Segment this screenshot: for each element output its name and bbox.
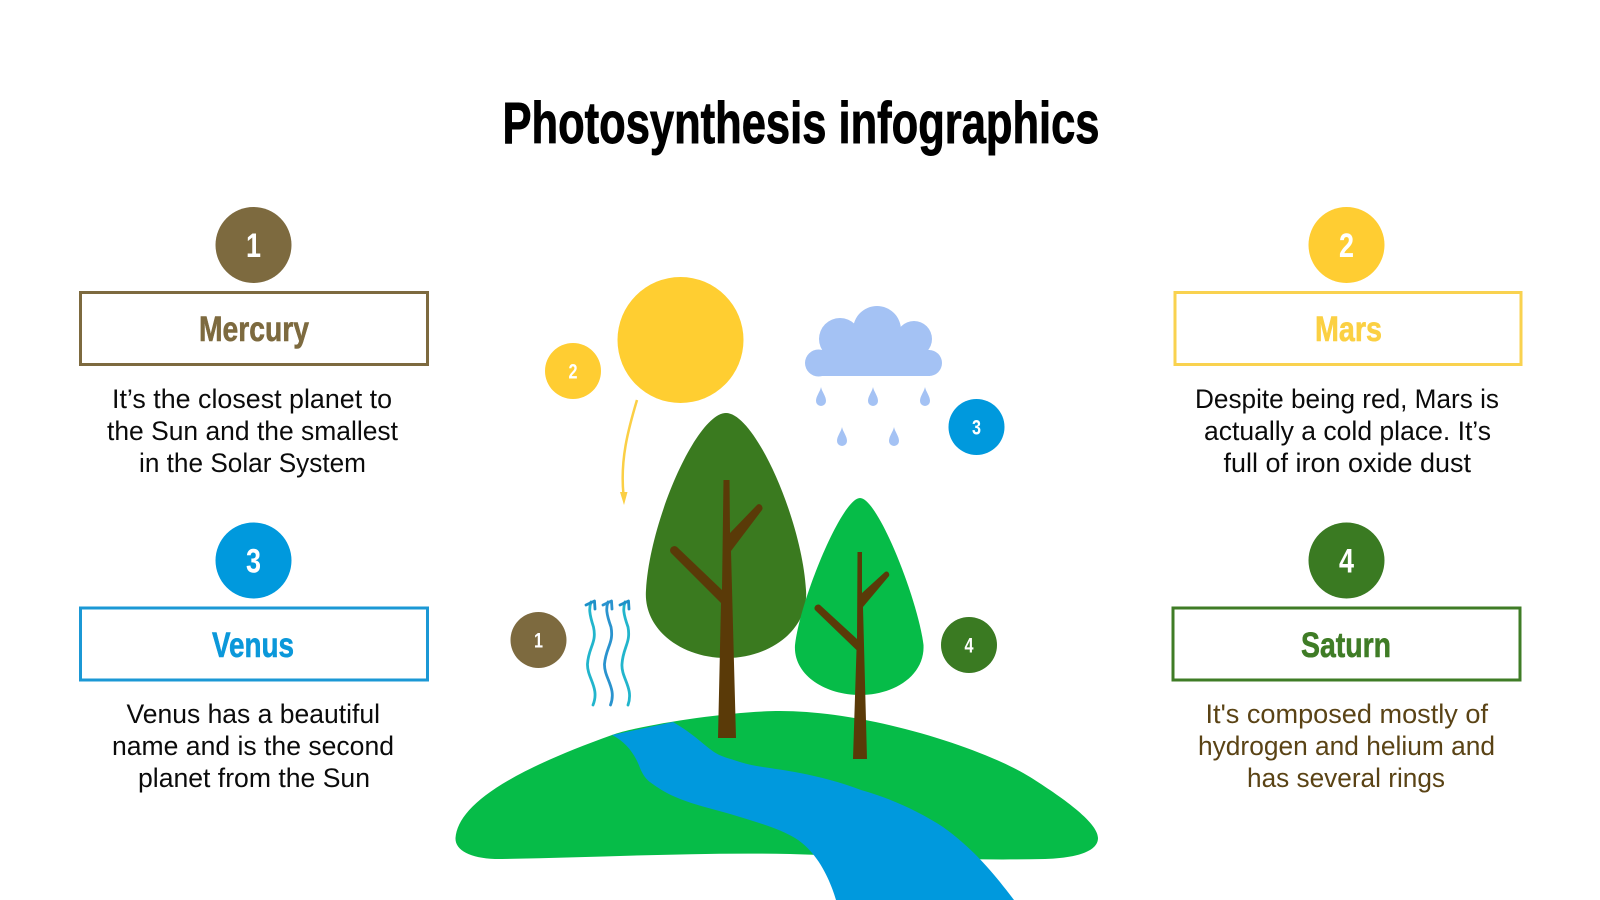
text: Saturn description: hydrogen and helium and (1198, 731, 1495, 761)
number badge 1: 1 (246, 227, 261, 265)
small tree (795, 498, 924, 759)
hill (455, 711, 1098, 859)
panel: Mercury (80, 207, 428, 478)
text: Venus description: Venus has a beautiful (126, 699, 380, 729)
text: Mars description: Despite being red, Mars is (1195, 384, 1499, 414)
marker 1 (510, 612, 566, 668)
icon: rain cloud (805, 306, 942, 446)
marker 2 (545, 343, 601, 399)
title: Photosynthesis infographics (502, 91, 1100, 156)
label box: Venus (80, 608, 428, 680)
label box: Mercury: Mercury (199, 310, 309, 349)
text: Saturn description (1198, 699, 1495, 793)
number badge 3 (216, 522, 292, 598)
number badge 2 (1308, 207, 1384, 283)
river (612, 722, 1014, 900)
text: Venus description (112, 699, 394, 793)
text: Venus description: name and is the second (112, 731, 394, 761)
marker 4: 4 (964, 634, 974, 658)
label box: Mars: Mars (1315, 310, 1382, 349)
big tree (646, 413, 806, 738)
panel: Mars (1175, 207, 1521, 478)
icon: sun (618, 277, 744, 403)
text: Saturn description: It's composed mostly of (1206, 699, 1489, 729)
label box: Mercury (80, 292, 428, 364)
marker 1: 1 (534, 630, 543, 652)
label box: Venus: Venus (212, 626, 294, 665)
text: Mars description: full of iron oxide dust (1224, 448, 1472, 478)
number badge 4 (1308, 522, 1384, 598)
panel: Saturn (1173, 522, 1520, 793)
text: Mercury description (107, 384, 399, 478)
label box: Saturn (1173, 608, 1520, 680)
marker 2: 2 (568, 360, 578, 384)
arrow: sunlight (620, 400, 637, 505)
label box: Mars (1175, 292, 1521, 364)
illustration: landscape (455, 277, 1098, 900)
marker 4 (941, 617, 997, 673)
label box: Saturn: Saturn (1301, 626, 1391, 665)
text: Mercury description: It’s the closest planet to (112, 384, 392, 414)
text: Mars description: actually a cold place. It’s (1204, 416, 1491, 446)
marker 3: 3 (972, 416, 981, 440)
text: Venus description: planet from the Sun (138, 763, 370, 793)
number badge 3: 3 (246, 542, 261, 580)
icon: rising water vapour arrows (586, 601, 630, 705)
text: Saturn description: has several rings (1247, 763, 1445, 793)
number badge 2: 2 (1339, 227, 1354, 265)
text: Mercury description: the Sun and the smallest (107, 416, 399, 446)
marker 3 (948, 399, 1004, 455)
number badge 1 (216, 207, 292, 283)
text: Mars description (1195, 384, 1499, 478)
number badge 4: 4 (1339, 542, 1354, 580)
panel: Venus (80, 522, 428, 793)
text: Mercury description: in the Solar System (139, 448, 366, 478)
